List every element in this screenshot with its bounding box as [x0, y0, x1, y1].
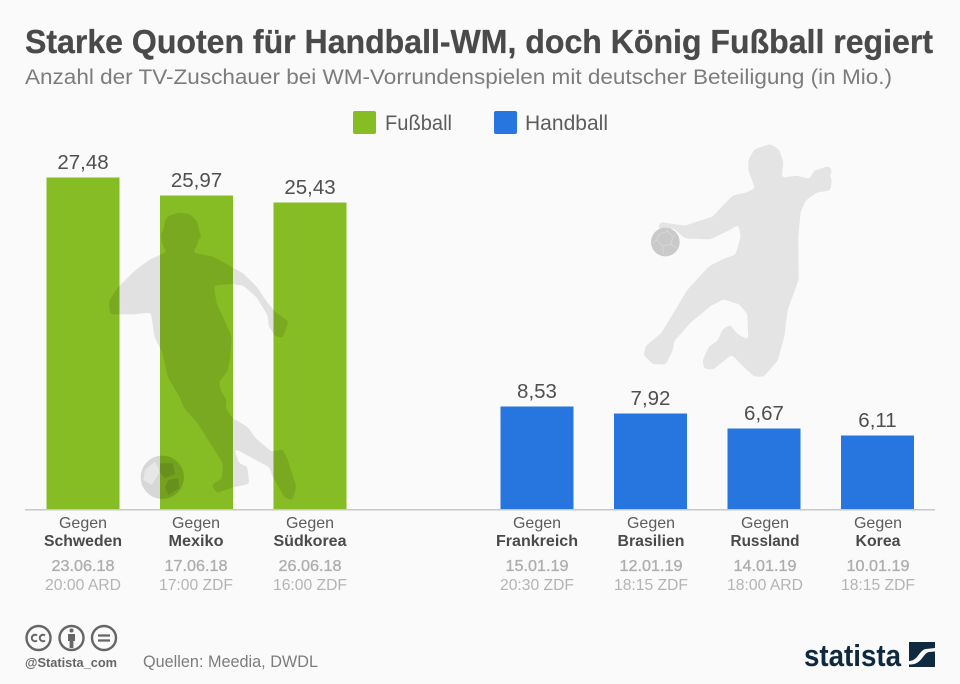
axis labels: Korea: Gegen — [854, 515, 902, 532]
axis labels: Frankreich: 15.01.19 — [506, 558, 569, 575]
axis labels: Frankreich — [496, 515, 578, 594]
value labels — [57, 151, 897, 432]
axis labels: Schweden: Schweden — [44, 533, 122, 550]
icon: statista mark — [909, 642, 935, 667]
axis labels: Südkorea: Südkorea — [274, 533, 347, 550]
axis labels: Schweden — [44, 515, 122, 594]
axis labels: Frankreich: Gegen — [513, 515, 561, 532]
icon: handball player silhouette with ball — [644, 144, 832, 377]
value labels: 25,97 — [171, 169, 222, 192]
value labels: 6,11 — [858, 409, 897, 432]
axis labels: Korea — [841, 515, 915, 594]
axis labels: Südkorea: 16:00 ZDF — [273, 577, 347, 594]
legend — [353, 111, 608, 135]
axis labels: Mexiko: Mexiko — [168, 533, 224, 550]
bar chart: Fußball bars — [46, 178, 346, 509]
axis labels: Russland: 14.01.19 — [734, 558, 797, 575]
legend: Handball — [494, 111, 608, 135]
axis labels: Mexiko: Gegen — [172, 515, 220, 532]
axis labels: Russland: Gegen — [741, 515, 789, 532]
social handle: @Statista_com — [25, 655, 117, 670]
source: Quellen: Meedia, DWDL — [143, 652, 318, 671]
axis labels: Russland: Russland — [730, 533, 800, 550]
axis labels: Brasilien — [614, 515, 688, 594]
icon: football player silhouette with ball — [109, 213, 296, 501]
legend: Fußball — [353, 111, 452, 135]
axis labels: Frankreich: Frankreich — [496, 533, 578, 550]
axis labels: Korea: 18:15 ZDF — [841, 577, 915, 594]
value labels: 27,48 — [57, 151, 109, 174]
statista logo: statista — [804, 638, 902, 673]
axis labels: Korea: 10.01.19 — [846, 558, 910, 575]
value labels: 8,53 — [517, 380, 557, 403]
value labels: 6,67 — [744, 402, 784, 425]
axis labels: Brasilien: 12.01.19 — [620, 558, 683, 575]
axis labels: Brasilien: 18:15 ZDF — [614, 577, 688, 594]
value labels: 7,92 — [631, 387, 670, 410]
axis labels: Brasilien: Gegen — [627, 515, 675, 532]
axis labels: Brasilien: Brasilien — [618, 533, 684, 550]
axis labels: Mexiko — [159, 515, 233, 594]
axis labels: Russland — [727, 515, 803, 594]
legend: Fußball: Fußball — [385, 112, 452, 135]
axis labels: Schweden: 20:00 ARD — [45, 577, 121, 594]
title: Starke Quoten für Handball-WM, doch König Fußball regiert — [25, 24, 933, 61]
value labels: 25,43 — [284, 176, 336, 199]
axis labels: Südkorea: 26.06.18 — [278, 558, 342, 575]
axis baseline — [25, 509, 935, 510]
axis labels: Russland: 18:00 ARD — [727, 577, 803, 594]
axis labels: Frankreich: 20:30 ZDF — [500, 577, 574, 594]
axis labels: Südkorea: Gegen — [286, 515, 334, 532]
bar chart: Handball bars — [500, 406, 914, 509]
axis labels: Schweden: Gegen — [59, 515, 107, 532]
axis labels: Schweden: 23.06.18 — [52, 558, 115, 575]
legend: Handball: Handball — [525, 112, 608, 135]
axis labels: Mexiko: 17:00 ZDF — [159, 577, 233, 594]
icon: Creative Commons licence badges — [26, 626, 116, 650]
subtitle: Anzahl der TV-Zuschauer bei WM-Vorrundenspielen mit deutscher Beteiligung (in Mio.) — [25, 65, 892, 89]
axis labels: Mexiko: 17.06.18 — [164, 558, 228, 575]
axis labels: Südkorea — [273, 515, 347, 594]
axis labels: Korea: Korea — [856, 533, 901, 550]
